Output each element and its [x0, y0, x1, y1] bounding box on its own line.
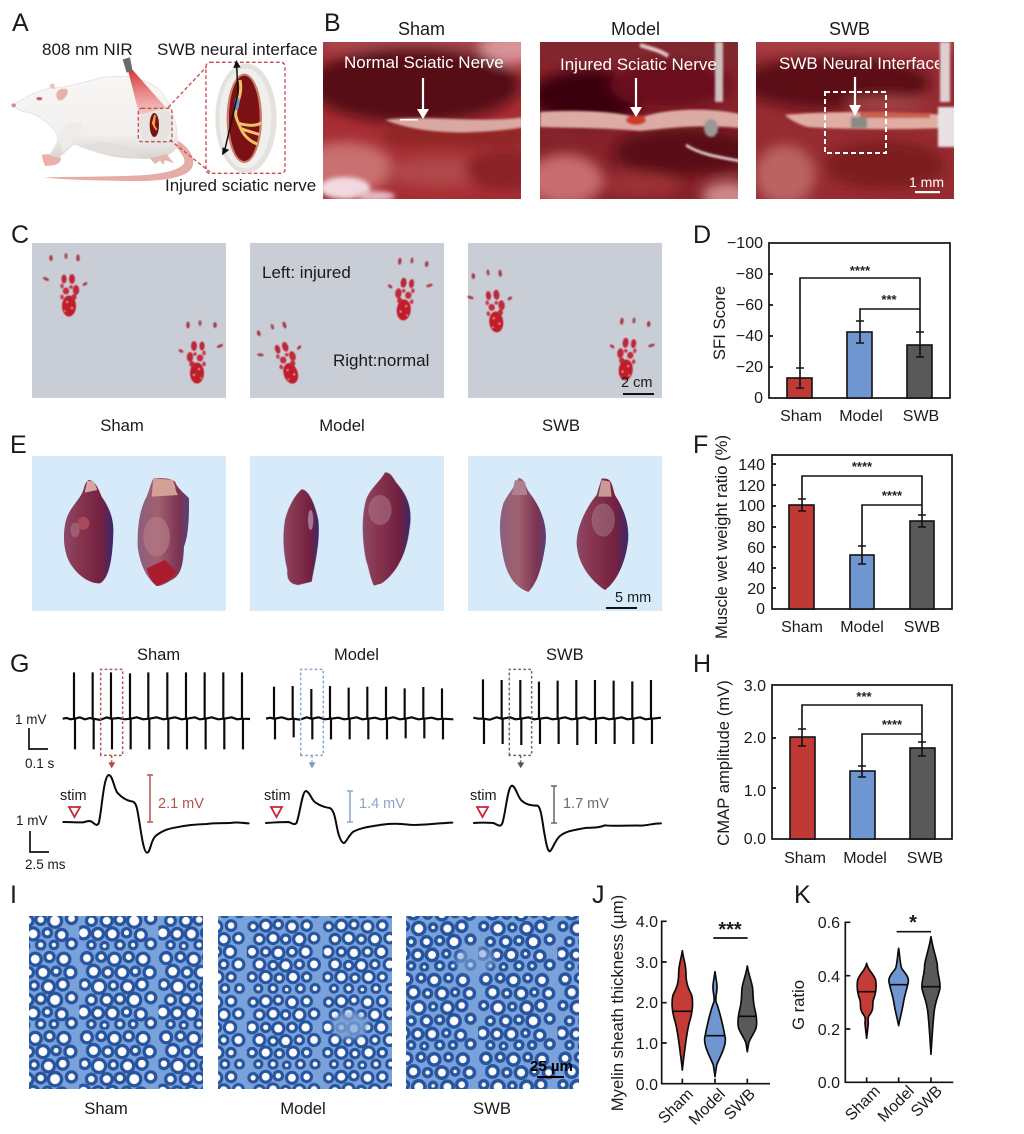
scale bar 1 mV / 2.5 ms: [16, 813, 66, 872]
y ticks: 60: [747, 540, 765, 557]
plot frame: [772, 685, 952, 839]
stim label and marker Sham: [60, 788, 87, 817]
violin SWB: [738, 966, 757, 1052]
y tick labels: 1.0: [636, 1036, 658, 1053]
x labels: Model: [875, 1083, 918, 1126]
amplitude bar 1.7 mV: 1.7 mV: [563, 796, 609, 812]
x labels: SWB: [908, 1083, 946, 1121]
photo: sham muscles: [32, 456, 226, 611]
x labels: Sham: [784, 850, 826, 867]
y ticks: 140: [738, 457, 765, 474]
y ticks: −80: [736, 266, 763, 283]
amplitude bar 2.1 mV: [147, 775, 204, 822]
x labels: Sham: [655, 1086, 697, 1127]
y ticks: [744, 678, 776, 848]
scale bar 25 µm: 25 µm: [530, 1058, 573, 1075]
y tick labels: 0.2: [818, 1022, 840, 1039]
axes: [845, 922, 953, 1082]
heading: SWB: SWB: [829, 19, 870, 39]
y axis title: SFI Score: [710, 286, 729, 360]
photo: model footprints: [249, 243, 444, 398]
y ticks: −40: [736, 328, 763, 345]
heading: Model: Model: [611, 19, 660, 39]
x labels: SWB: [903, 408, 939, 425]
stim label and marker Sham: stim: [60, 788, 87, 804]
CMAP waveform SWB: [474, 786, 661, 851]
label H: H: [693, 650, 711, 678]
label F: F: [693, 431, 708, 459]
y ticks: 80: [747, 519, 765, 536]
scale bar 1 mV / 0.1 s: 0.1 s: [25, 756, 55, 771]
x labels: [655, 1086, 759, 1129]
label J: J: [592, 881, 604, 909]
bar Sham: [787, 378, 812, 398]
x labels: Model: [843, 850, 887, 867]
panel B: surgical photos: [323, 14, 954, 199]
y ticks: 0: [756, 601, 765, 618]
text: right normal: Right:normal: [333, 351, 429, 370]
spike train SWB: [473, 679, 661, 745]
x labels: Model: [839, 408, 883, 425]
heading SWB: SWB: [546, 646, 584, 664]
y ticks: 40: [747, 560, 765, 577]
y tick labels: 0.4: [818, 969, 840, 986]
significance: ****: [882, 717, 903, 732]
micrograph SWB: [406, 916, 579, 1089]
panel F: muscle wet weight ratio bar chart: [693, 431, 952, 639]
caption Sham: Sham: [84, 1099, 128, 1118]
plot frame: [769, 243, 950, 398]
panel I: toluidine blue micrographs: [10, 881, 579, 1118]
x labels: [781, 619, 940, 636]
scale bar 1 mV / 2.5 ms: 2.5 ms: [25, 857, 66, 872]
bar SWB: [910, 748, 935, 839]
caption SWB: SWB: [542, 416, 580, 435]
photo: SWB neural interface: [756, 42, 954, 199]
median Model: [889, 982, 908, 987]
panel C: footprints: [11, 221, 662, 435]
x labels: SWB: [907, 850, 943, 867]
selection box SWB with arrow: [509, 669, 532, 768]
CMAP waveform Model: [266, 791, 452, 843]
panel A: rat schematic: [11, 9, 318, 195]
micrograph Sham: [29, 916, 203, 1089]
y ticks: −60: [736, 297, 763, 314]
y ticks: 1.0: [744, 783, 766, 800]
scale bar 1 mV / 0.1 s: 1 mV: [15, 712, 47, 727]
bar Sham: [789, 505, 814, 609]
arrow: [422, 78, 424, 112]
scale bar 5 mm: [606, 590, 651, 609]
error bars and brackets: [796, 278, 924, 388]
violin Sham: [857, 963, 876, 1038]
selection box Sham with arrow: [101, 669, 123, 768]
median SWB: [922, 984, 940, 989]
y ticks: 20: [747, 581, 765, 598]
label K: K: [794, 881, 811, 909]
bar Model: [850, 555, 874, 609]
violin Sham: [672, 951, 693, 1070]
scale bar 1 mV / 2.5 ms: 1 mV: [16, 813, 48, 828]
scale bar 1 mm: 1 mm: [909, 174, 944, 190]
bar Sham: [790, 737, 815, 839]
y tick labels: [818, 915, 840, 1092]
stim label and marker Model: [264, 788, 291, 817]
x labels: Sham: [842, 1083, 884, 1124]
y tick labels: 4.0: [636, 914, 658, 931]
y ticks: 3.0: [744, 678, 766, 695]
spike train Model: [266, 686, 453, 739]
significance: *: [909, 912, 917, 934]
y ticks: 2.0: [744, 730, 766, 747]
median Sham: [673, 1009, 692, 1014]
arrow: [854, 77, 856, 108]
significance: ***: [856, 689, 873, 704]
photo: normal sciatic nerve: [323, 42, 521, 199]
rat illustration: [11, 57, 285, 181]
laser head: [123, 57, 133, 73]
violin SWB: [922, 937, 940, 1054]
label: 808 nm NIR: 808 nm NIR: [42, 40, 133, 59]
heading Model: Model: [334, 646, 379, 664]
micrograph Model: [218, 916, 392, 1089]
label: injured sciatic nerve: Injured sciatic nerve: [165, 176, 316, 195]
caption Model: Model: [319, 416, 365, 435]
caption: SWB Neural Interface: [779, 54, 943, 73]
heading: Sham: Sham: [398, 19, 445, 39]
y ticks: [738, 457, 776, 618]
y ticks: [727, 235, 773, 407]
label B: B: [324, 9, 341, 37]
panel E: muscles: [10, 431, 662, 611]
arrow: [635, 78, 637, 110]
y axis title: G ratio: [789, 980, 808, 1030]
axes: [662, 921, 770, 1084]
heading Sham: Sham: [137, 646, 180, 664]
y ticks: 120: [738, 478, 765, 495]
label I: I: [10, 881, 17, 909]
caption: Normal Sciatic Nerve: [344, 53, 504, 72]
CMAP waveform Sham: [63, 775, 249, 853]
label C: C: [11, 221, 29, 249]
stim label and marker SWB: stim: [470, 788, 497, 804]
significance: ***: [718, 919, 742, 941]
selection box Model with arrow: [301, 669, 323, 768]
label G: G: [10, 650, 29, 678]
photo: SWB footprints: [464, 243, 662, 398]
significance line: [897, 929, 931, 934]
scale bar 1 mV / 0.1 s: [15, 712, 55, 771]
significance: ****: [852, 459, 873, 474]
light cone: [128, 70, 166, 115]
y axis title: CMAP amplitude (mV): [714, 680, 733, 846]
error bars and brackets: [798, 476, 926, 564]
label D: D: [693, 221, 711, 249]
x labels: SWB: [721, 1086, 759, 1124]
caption Sham: Sham: [100, 416, 144, 435]
x labels: SWB: [904, 619, 940, 636]
caption SWB: SWB: [473, 1099, 511, 1118]
y axis title: Myelin sheath thickness (µm): [608, 895, 627, 1111]
panel K: G ratio violin plot: [789, 881, 953, 1126]
label A: A: [12, 9, 29, 37]
amplitude bar 1.7 mV: [551, 786, 609, 823]
x labels: Model: [686, 1086, 729, 1129]
spike train Sham: [63, 672, 250, 749]
violin Model: [889, 948, 908, 1026]
caption Model: Model: [280, 1099, 326, 1118]
y ticks: −20: [736, 359, 763, 376]
error bars and brackets: [798, 705, 926, 777]
bar SWB: [907, 345, 932, 398]
y tick labels: 0.0: [636, 1077, 658, 1094]
y ticks: 100: [738, 498, 765, 515]
violins: [845, 922, 953, 1082]
panel J: myelin thickness violin plot: [592, 881, 770, 1129]
x labels: Sham: [780, 408, 822, 425]
x labels: [842, 1083, 946, 1126]
significance: ***: [881, 292, 898, 307]
y ticks: 0.0: [744, 831, 766, 848]
y ticks: −100: [727, 235, 763, 252]
median Sham: [858, 989, 876, 994]
median SWB: [738, 1014, 757, 1019]
y tick labels: 0.6: [818, 915, 840, 932]
photo: SWB muscles: [468, 456, 662, 611]
y ticks: 0: [754, 390, 763, 407]
median Model: [705, 1033, 725, 1038]
panel D: SFI score bar chart: [693, 221, 950, 425]
bar Model: [847, 332, 872, 398]
x labels: Sham: [781, 619, 823, 636]
text: left injured: Left: injured: [262, 263, 351, 282]
photo: sham footprints: [32, 243, 226, 398]
plot frame: [772, 455, 952, 609]
panel G: CMAP traces: [10, 646, 661, 872]
amplitude bar 1.4 mV: [347, 791, 405, 822]
x labels: [780, 408, 939, 425]
panel H: CMAP amplitude bar chart: [693, 650, 952, 867]
significance: ****: [882, 488, 903, 503]
photo: injured sciatic nerve: [540, 42, 738, 199]
y tick labels: [636, 914, 658, 1094]
amplitude bar 1.4 mV: 1.4 mV: [359, 796, 405, 812]
stim label and marker Model: stim: [264, 788, 291, 804]
y tick labels: 0.0: [818, 1075, 840, 1092]
y axis title: Muscle wet weight ratio (%): [712, 435, 731, 639]
violin Model: [705, 972, 725, 1077]
scale bar 5 mm: 5 mm: [615, 590, 651, 606]
significance line: [713, 935, 748, 940]
violins: [662, 921, 770, 1084]
y tick labels: 2.0: [636, 995, 658, 1012]
stim label and marker SWB: [470, 788, 497, 817]
amplitude bar 2.1 mV: 2.1 mV: [158, 796, 204, 812]
bar SWB: [910, 521, 934, 609]
x labels: [784, 850, 943, 867]
bar Model: [850, 771, 875, 839]
label: SWB neural interface: SWB neural interface: [157, 40, 318, 59]
y tick labels: 3.0: [636, 955, 658, 972]
caption: Injured Sciatic Nerve: [560, 55, 717, 74]
photo: model muscles: [250, 456, 444, 611]
x labels: Model: [840, 619, 884, 636]
scale bar 2 cm: 2 cm: [621, 375, 652, 391]
label E: E: [10, 431, 27, 459]
dashed region: [825, 92, 886, 153]
significance: ****: [850, 263, 871, 278]
